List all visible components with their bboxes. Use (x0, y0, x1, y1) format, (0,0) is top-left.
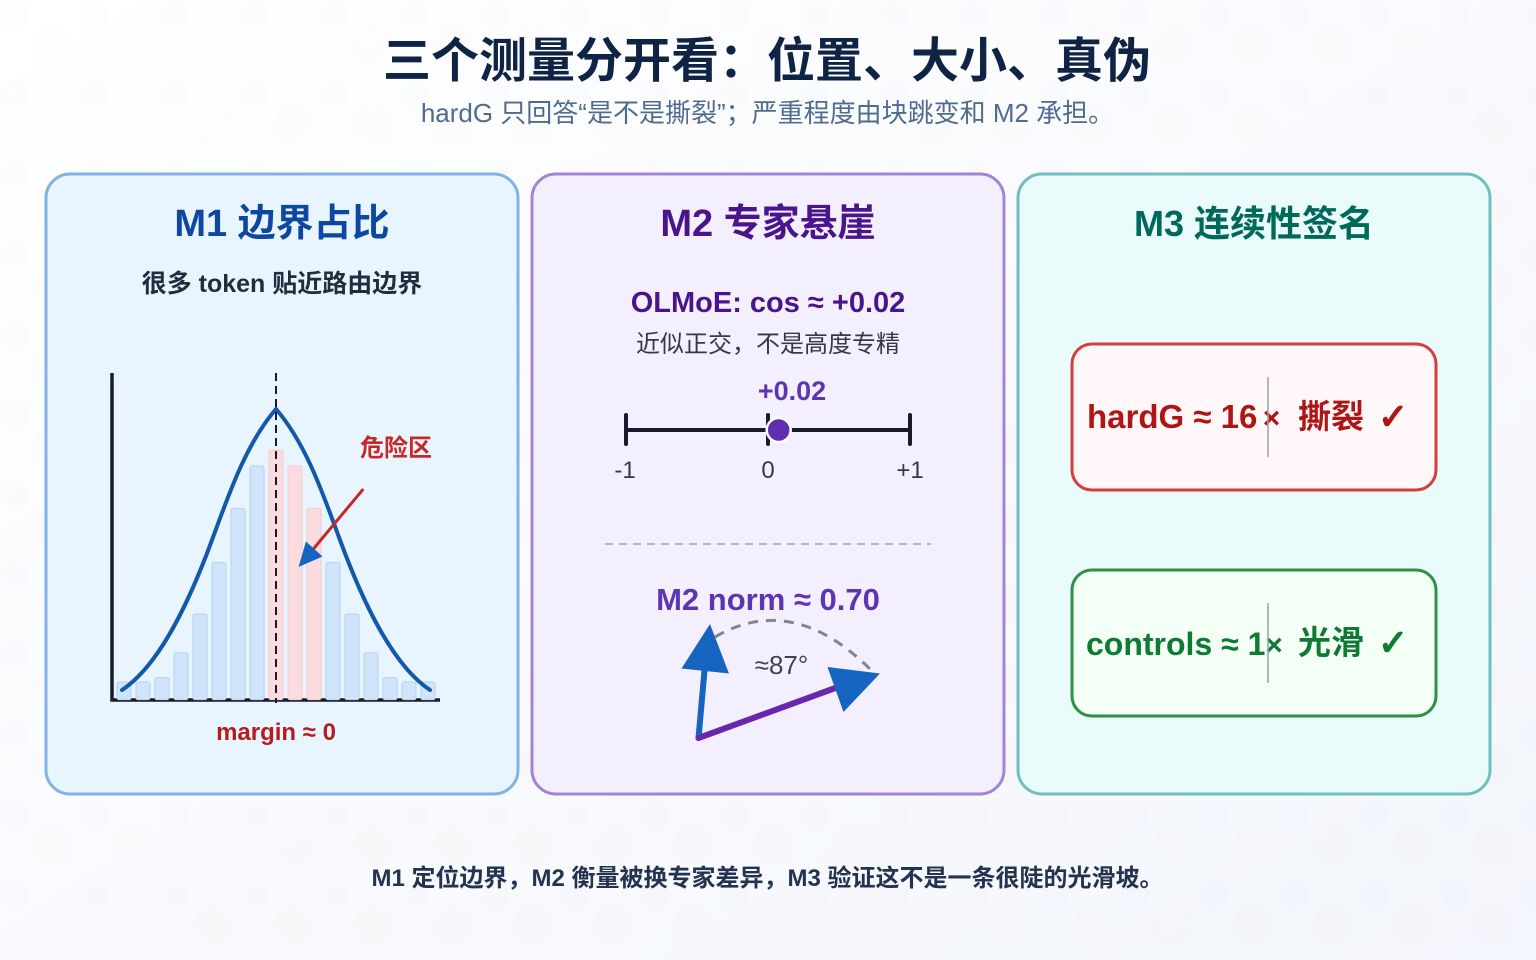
card: hardG tear: ✓ (1378, 397, 1408, 438)
card: hardG tear: × (1263, 402, 1280, 435)
card: hardG tear (1072, 344, 1436, 490)
purple vector (698, 667, 880, 738)
card: controls smooth: 光滑 (1298, 624, 1364, 661)
tick labels: -1 (614, 457, 636, 484)
marker dot (767, 418, 791, 442)
vector angle diagram (682, 620, 880, 738)
chart axes (112, 373, 440, 700)
number line: 0 (761, 457, 775, 484)
panel: M3 continuity signature (1018, 174, 1490, 794)
cosine description: 近似正交，不是高度专精 (636, 331, 900, 358)
footer summary: M1 定位边界，M2 衡量被换专家差异，M3 验证这不是一条很陡的光滑坡。 (371, 864, 1164, 892)
distribution curve (122, 409, 430, 690)
card: controls smooth: × (1265, 629, 1283, 662)
M1 description: 很多 token 贴近路由边界 (142, 270, 422, 298)
boundary dashed line (275, 373, 277, 703)
cosine value: OLMoE: cos ≈ +0.02 (631, 287, 905, 319)
panel: M1 boundary share (46, 174, 518, 794)
card: hardG tear: 撕裂 (1298, 398, 1364, 435)
arrow: danger zone pointer (298, 490, 362, 567)
card: controls smooth: ✓ (1378, 623, 1408, 664)
M2 heading: M2 专家悬崖 (660, 203, 876, 245)
number line: +1 (896, 457, 924, 484)
margin label: margin ≈ 0 (216, 719, 336, 746)
title: 三个测量分开看：位置、大小、真伪 (383, 35, 1151, 88)
marker value: +0.02 (758, 376, 826, 406)
card: controls smooth: controls ≈ 1 (1086, 626, 1265, 662)
subtitle: hardG 只回答“是不是撕裂”；严重程度由块跳变和 M2 承担。 (421, 98, 1114, 128)
blue vector (682, 624, 729, 738)
panel: M2 expert cliff (532, 174, 1004, 794)
angle label: ≈87° (755, 650, 808, 680)
M2 norm value: M2 norm ≈ 0.70 (656, 582, 880, 617)
M3 heading: M3 连续性签名 (1134, 203, 1374, 244)
card: hardG tear: hardG ≈ 16 (1087, 398, 1257, 435)
angle arc (715, 620, 870, 669)
histogram bars (117, 450, 435, 700)
histogram chart (112, 373, 440, 746)
danger zone label: 危险区 (360, 435, 432, 462)
number line (614, 376, 924, 484)
M1 heading: M1 边界占比 (174, 203, 390, 245)
card: controls smooth (1072, 570, 1436, 716)
